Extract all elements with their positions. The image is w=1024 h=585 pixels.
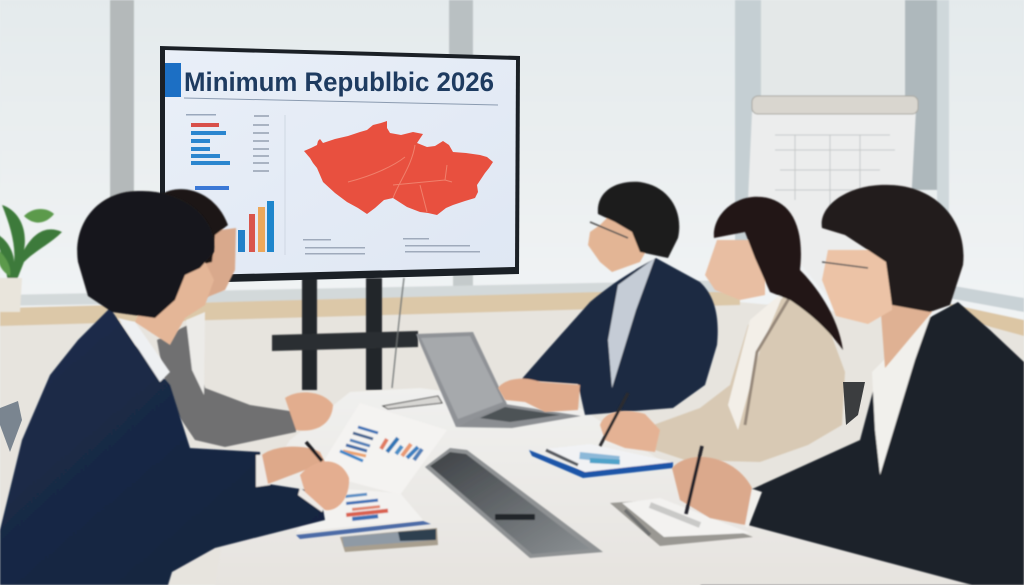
hair (598, 182, 679, 258)
meeting table (215, 388, 972, 585)
shirt collar (118, 318, 170, 382)
white clipboard (610, 498, 753, 546)
neck and face (135, 262, 214, 345)
presentation screen (160, 46, 520, 282)
hair and ponytail (714, 197, 843, 350)
hair (77, 191, 214, 318)
person: woman in beige blazer (600, 197, 845, 462)
face (205, 228, 236, 298)
TV stand (272, 278, 418, 390)
jacket (0, 308, 325, 585)
whiteboard chart sketch (775, 135, 895, 210)
hands (672, 457, 752, 525)
chair back (843, 382, 865, 425)
person: centre presenter in navy suit (498, 182, 718, 415)
jacket (521, 258, 718, 415)
pen (306, 442, 322, 461)
slide map: red country (304, 121, 493, 215)
lower donut bars (345, 493, 388, 521)
hand (285, 392, 333, 431)
hands (600, 411, 660, 452)
upper report sheet with charts (323, 403, 447, 495)
pen (600, 393, 628, 446)
slide column chart (238, 201, 274, 252)
blouse (728, 290, 785, 430)
hands (262, 447, 325, 484)
pen (686, 446, 702, 514)
plant (0, 205, 62, 312)
whiteboard (748, 96, 918, 300)
lower wall (0, 302, 1024, 585)
slate table panel (425, 448, 603, 558)
slide ranking bar list (186, 114, 285, 255)
window sill frame (0, 280, 740, 306)
face (705, 240, 765, 300)
shirt (186, 312, 205, 395)
glasses (590, 222, 628, 238)
report right bars (381, 438, 422, 460)
window pillars (110, 0, 949, 300)
notebook behind laptop (383, 396, 442, 409)
person: front left man in navy suit (0, 191, 349, 585)
left chair (0, 401, 22, 452)
jacket (645, 288, 845, 462)
hands (498, 379, 580, 412)
glasses (822, 262, 868, 268)
hair (160, 189, 228, 270)
lapel line (745, 290, 794, 425)
whiteboard top roll (752, 96, 918, 114)
face (822, 250, 892, 324)
jacket (157, 325, 296, 447)
person: front right man head and hands (672, 185, 964, 528)
hair (822, 185, 964, 312)
person: front right man jacket behind table (700, 302, 1024, 585)
plant pot (0, 278, 22, 312)
slide title accent (165, 63, 181, 97)
person: man in grey suit (157, 189, 333, 447)
cuff (256, 455, 270, 487)
blue clipboard (529, 444, 673, 478)
slide footnotes (303, 238, 480, 254)
shirt (608, 258, 655, 388)
report left bars (340, 427, 378, 461)
head (588, 215, 655, 272)
wooden ledge (0, 292, 740, 326)
cuff (738, 488, 762, 528)
phone (340, 528, 438, 552)
lower report clipboard (296, 488, 431, 539)
neck (880, 300, 932, 368)
slide title: Minimum Republbic 2026 (184, 67, 494, 97)
laptop (383, 332, 581, 428)
